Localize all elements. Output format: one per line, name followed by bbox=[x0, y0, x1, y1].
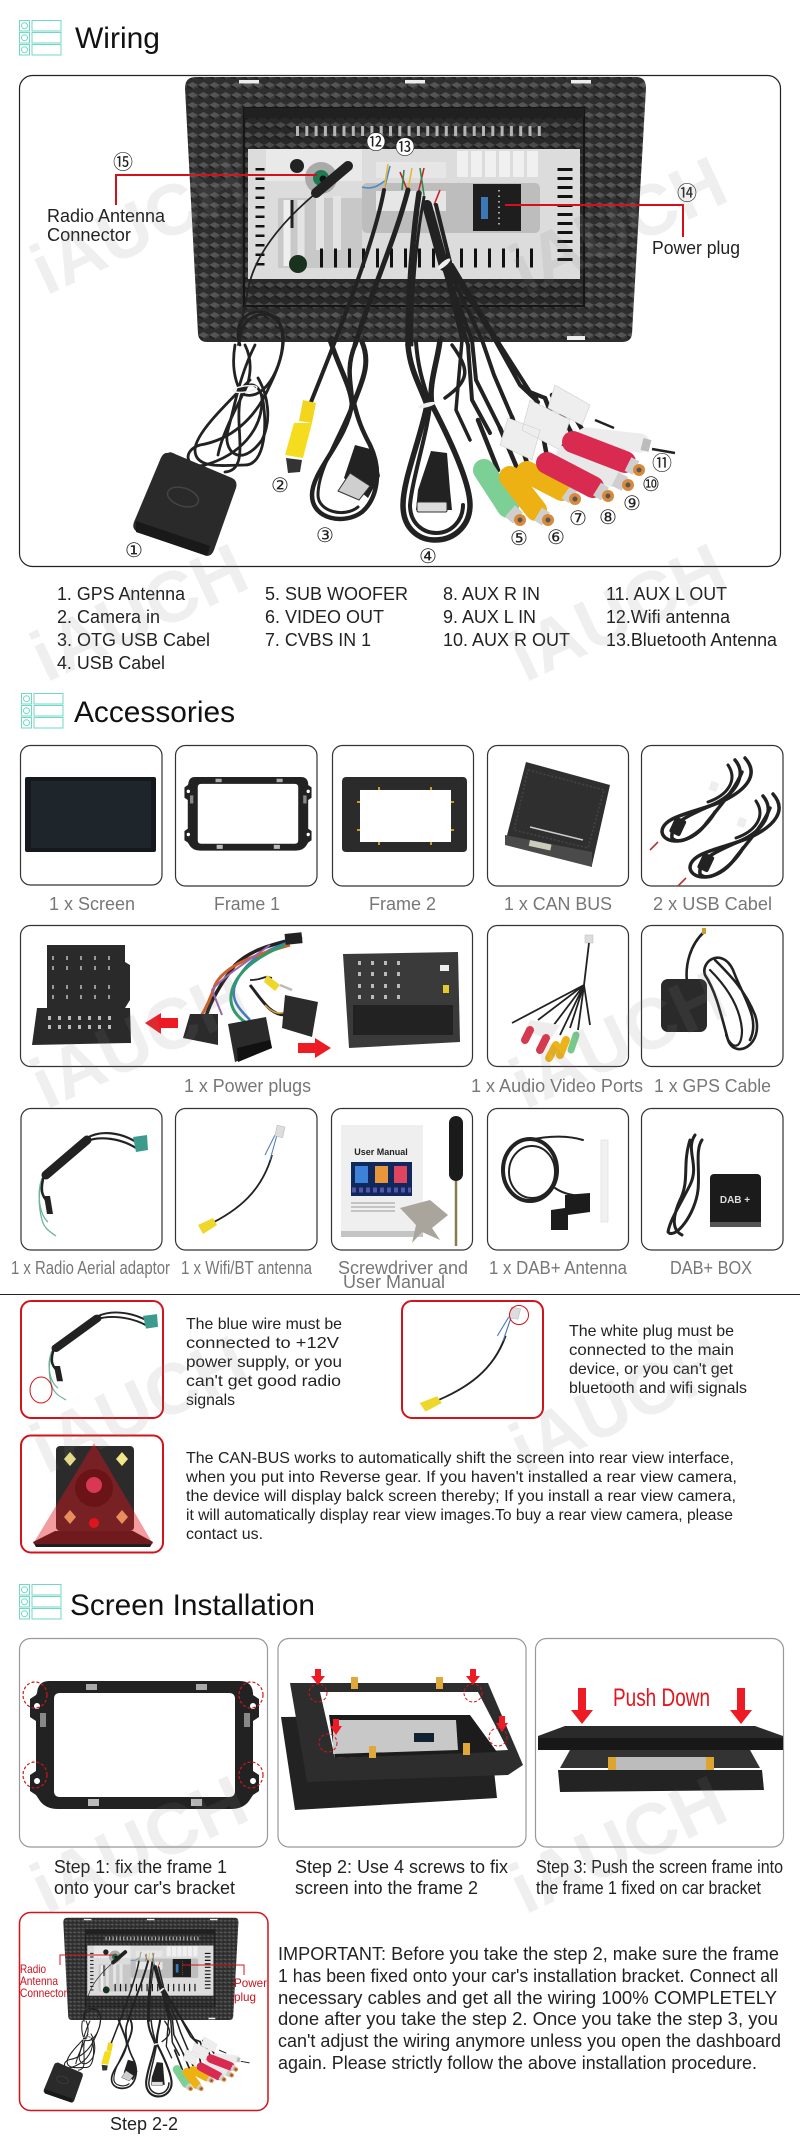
step 2-2 card: Antenna bbox=[20, 1974, 58, 1988]
circled cable numbers: ⑦ bbox=[569, 506, 587, 530]
legend: cable list: 1. GPS Antenna bbox=[57, 584, 186, 604]
step 2 card bbox=[278, 1638, 526, 1847]
step 1 caption: onto your car's bracket bbox=[54, 1878, 235, 1898]
watermarks: iAUCH bbox=[498, 1761, 738, 1930]
note text: blue wire: power supply, or you bbox=[186, 1354, 342, 1371]
text block: important notice bbox=[278, 1944, 781, 2073]
legend: cable list: 2. Camera in bbox=[57, 607, 160, 627]
text block: important notice: necessary cables and get all the wiring 100% COMPLETELY bbox=[278, 1988, 777, 2008]
circled cable numbers: ④ bbox=[419, 544, 437, 568]
text block: important notice: can't adjust the wiring anymore unless you open the dashboard bbox=[278, 2031, 781, 2051]
watermarks: iAUCH bbox=[19, 1761, 259, 1930]
note text: white plug: device, or you can't get bbox=[569, 1361, 734, 1378]
accessory: screwdriver and user manual: User Manual bbox=[354, 1147, 408, 1157]
accessory: frame 2: Frame 2 bbox=[369, 894, 436, 914]
circled cable numbers: ② bbox=[271, 473, 289, 497]
legend: cable list: 4. USB Cabel bbox=[57, 653, 165, 673]
legend: cable list: 11. AUX L OUT bbox=[606, 584, 727, 604]
legend: cable list: 13.Bluetooth Antenna bbox=[606, 630, 778, 650]
step 1 card bbox=[20, 1638, 268, 1847]
accessory: audio video ports bbox=[471, 926, 643, 1096]
note card: rear view camera warning bbox=[21, 1436, 163, 1552]
callout: radio antenna connector bbox=[47, 175, 317, 245]
section icon: accessories bbox=[22, 694, 63, 728]
step 2-2 card: Connector bbox=[20, 1986, 67, 2000]
step 2-2 card: plug bbox=[234, 1990, 256, 2004]
text block: important notice: done after you take the step 2. Once you take the step 3, you bbox=[278, 2009, 778, 2029]
step 2-2 card bbox=[20, 1912, 268, 2110]
circled cable numbers: ⑥ bbox=[547, 525, 565, 549]
accessory: DAB+ antenna bbox=[488, 1108, 628, 1278]
accessory: DAB+ box bbox=[642, 1108, 783, 1278]
legend: cable list: 8. AUX R IN bbox=[443, 584, 540, 604]
step 2-2 card: Power bbox=[234, 1976, 267, 1990]
photo: device back with cables bbox=[133, 77, 675, 556]
section icon: wiring bbox=[20, 20, 61, 55]
legend: cable list: 9. AUX L IN bbox=[443, 607, 536, 627]
legend: cable list: 12.Wifi antenna bbox=[606, 607, 731, 627]
section icon: screen installation bbox=[20, 1584, 61, 1619]
circled cable numbers: ⑭ bbox=[677, 181, 697, 205]
arrow: right bbox=[298, 1038, 331, 1058]
legend: cable list: 7. CVBS IN 1 bbox=[265, 630, 371, 650]
black connectors bbox=[183, 995, 318, 1062]
note text: white plug: connected to the main bbox=[569, 1342, 734, 1359]
accessory: radio aerial adaptor: 1 x Radio Aerial adaptor bbox=[11, 1258, 170, 1278]
circled cable numbers: ⑧ bbox=[599, 505, 617, 529]
note text: white plug: The white plug must be bbox=[569, 1323, 734, 1340]
circled cable numbers: ⑫ bbox=[366, 130, 386, 154]
legend: cable list: 6. VIDEO OUT bbox=[265, 607, 384, 627]
step 2-2 card: Radio bbox=[20, 1962, 46, 1976]
accessory: screwdriver and user manual: User Manual bbox=[343, 1272, 445, 1292]
text block: important notice: 1 has been fixed onto your car's installation bracket. Connect all bbox=[278, 1966, 778, 1986]
note text: CAN-BUS: The CAN-BUS works to automatically shift the screen into rear view interface, bbox=[186, 1450, 734, 1467]
callout: power plug bbox=[505, 205, 740, 258]
note text: CAN-BUS: it will automatically display rear view images.To buy a rear view camera, please bbox=[186, 1507, 733, 1524]
circled cable numbers: ⑨ bbox=[623, 491, 641, 515]
note text: white plug bbox=[569, 1323, 747, 1397]
text block: important notice: IMPORTANT: Before you take the step 2, make sure the frame bbox=[278, 1944, 779, 1964]
connector: left harness plug bbox=[32, 945, 131, 1045]
text: Push Down: Push Down bbox=[613, 1684, 710, 1712]
accessory: frame 1: Frame 1 bbox=[214, 894, 280, 914]
circled cable numbers: ⑪ bbox=[652, 451, 672, 475]
step 1 caption: Step 1: fix the frame 1 bbox=[54, 1857, 227, 1877]
note card: wifi plug bbox=[402, 1301, 543, 1418]
note text: CAN-BUS: contact us. bbox=[186, 1526, 263, 1543]
heading: Screen Installation: Screen Installation bbox=[70, 1589, 315, 1622]
watermarks: iAUCH bbox=[19, 142, 259, 311]
legend: cable list: 10. AUX R OUT bbox=[443, 630, 570, 650]
note text: blue wire: can't get good radio bbox=[186, 1373, 341, 1390]
circled cable numbers: ⑤ bbox=[510, 526, 528, 550]
connector: right harness plug bbox=[343, 952, 460, 1048]
watermarks: iAUCH bbox=[498, 529, 738, 698]
harness wires bbox=[200, 932, 303, 1022]
accessory: radio aerial adaptor bbox=[11, 1108, 170, 1278]
note text: white plug: bluetooth and wifi signals bbox=[569, 1380, 747, 1397]
accessory: screen: 1 x Screen bbox=[49, 894, 135, 914]
accessory: screen bbox=[20, 746, 162, 914]
accessory: USB cables: 2 x USB Cabel bbox=[653, 894, 772, 914]
circled cable numbers: ① bbox=[125, 538, 143, 562]
watermarks: iAUCH bbox=[498, 1321, 738, 1490]
step 3 caption: the frame 1 fixed on car bracket bbox=[536, 1878, 761, 1898]
watermarks: iAUCH bbox=[19, 1321, 259, 1490]
step 3 caption bbox=[536, 1857, 783, 1898]
accessory: CAN BUS box: 1 x CAN BUS bbox=[504, 894, 612, 914]
step 2 caption: Step 2: Use 4 screws to fix bbox=[295, 1857, 508, 1877]
note card: radio adaptor bbox=[21, 1301, 163, 1418]
note text: blue wire: The blue wire must be bbox=[186, 1316, 342, 1333]
callout: radio antenna connector: Radio Antenna bbox=[47, 206, 166, 226]
accessory: DAB+ box: DAB+ BOX bbox=[670, 1258, 752, 1278]
accessory: DAB+ box: DAB + bbox=[720, 1195, 750, 1206]
accessory: power plugs: 1 x Power plugs bbox=[184, 1076, 311, 1096]
accessory: GPS cable: 1 x GPS Cable bbox=[654, 1076, 771, 1096]
step 3 card bbox=[536, 1638, 784, 1847]
accessory: wifi/BT antenna: 1 x Wifi/BT antenna bbox=[181, 1258, 313, 1278]
circled cable numbers: ⑩ bbox=[642, 472, 660, 496]
accessory: GPS cable bbox=[642, 926, 783, 1096]
heading: Wiring: Wiring bbox=[75, 22, 160, 55]
accessory: frame 2 bbox=[332, 746, 474, 914]
accessory: frame 1 bbox=[176, 746, 317, 914]
watermarks: iAUCH bbox=[19, 529, 259, 698]
circled cable numbers: ⑬ bbox=[395, 135, 415, 159]
accessory: wifi/BT antenna bbox=[176, 1108, 317, 1278]
arrow: left bbox=[145, 1013, 178, 1034]
callout: power plug: Power plug bbox=[652, 238, 740, 258]
accessory: CAN BUS box bbox=[488, 746, 628, 914]
accessory: USB cables bbox=[642, 746, 783, 914]
step 2 caption: screen into the frame 2 bbox=[295, 1878, 478, 1898]
legend: cable list: 3. OTG USB Cabel bbox=[57, 630, 210, 650]
note text: blue wire: signals bbox=[186, 1392, 235, 1409]
circled cable numbers: ③ bbox=[316, 523, 334, 547]
watermarks: iAUCH bbox=[498, 142, 738, 311]
watermarks: iAUCH bbox=[19, 956, 259, 1125]
accessory: DAB+ antenna: 1 x DAB+ Antenna bbox=[489, 1258, 628, 1278]
callout: radio antenna connector: Connector bbox=[47, 225, 131, 245]
note text: CAN-BUS bbox=[185, 1450, 737, 1543]
step 2-2 caption: Step 2-2 bbox=[110, 2114, 178, 2134]
panel: wiring photo bbox=[20, 76, 780, 568]
note text: blue wire bbox=[186, 1316, 342, 1409]
step 1 caption bbox=[54, 1857, 235, 1898]
accessory: power plugs bbox=[20, 926, 472, 1096]
circled cable numbers: ⑮ bbox=[113, 150, 133, 174]
accessory: audio video ports: 1 x Audio Video Ports bbox=[471, 1076, 643, 1096]
legend: cable list: 5. SUB WOOFER bbox=[265, 584, 408, 604]
watermarks: iAUCH bbox=[498, 956, 738, 1125]
note text: blue wire: connected to +12V bbox=[186, 1335, 339, 1352]
accessory: screwdriver and user manual bbox=[332, 1108, 472, 1292]
circled cable numbers bbox=[113, 130, 697, 568]
text block: important notice: again. Please strictly follow the above installation procedure. bbox=[278, 2053, 757, 2073]
note text: CAN-BUS: when you put into Reverse gear. If you haven't installed a rear view camera, bbox=[185, 1469, 737, 1486]
accessory: screwdriver and user manual: Screwdriver and bbox=[338, 1258, 468, 1278]
heading: Accessories: Accessories bbox=[74, 696, 235, 729]
step 2 caption bbox=[295, 1857, 508, 1898]
watermarks bbox=[19, 142, 738, 1930]
legend: cable list bbox=[57, 584, 778, 673]
note text: CAN-BUS: the device will display balck screen thereby; If you install a rear view camera, bbox=[186, 1488, 736, 1505]
